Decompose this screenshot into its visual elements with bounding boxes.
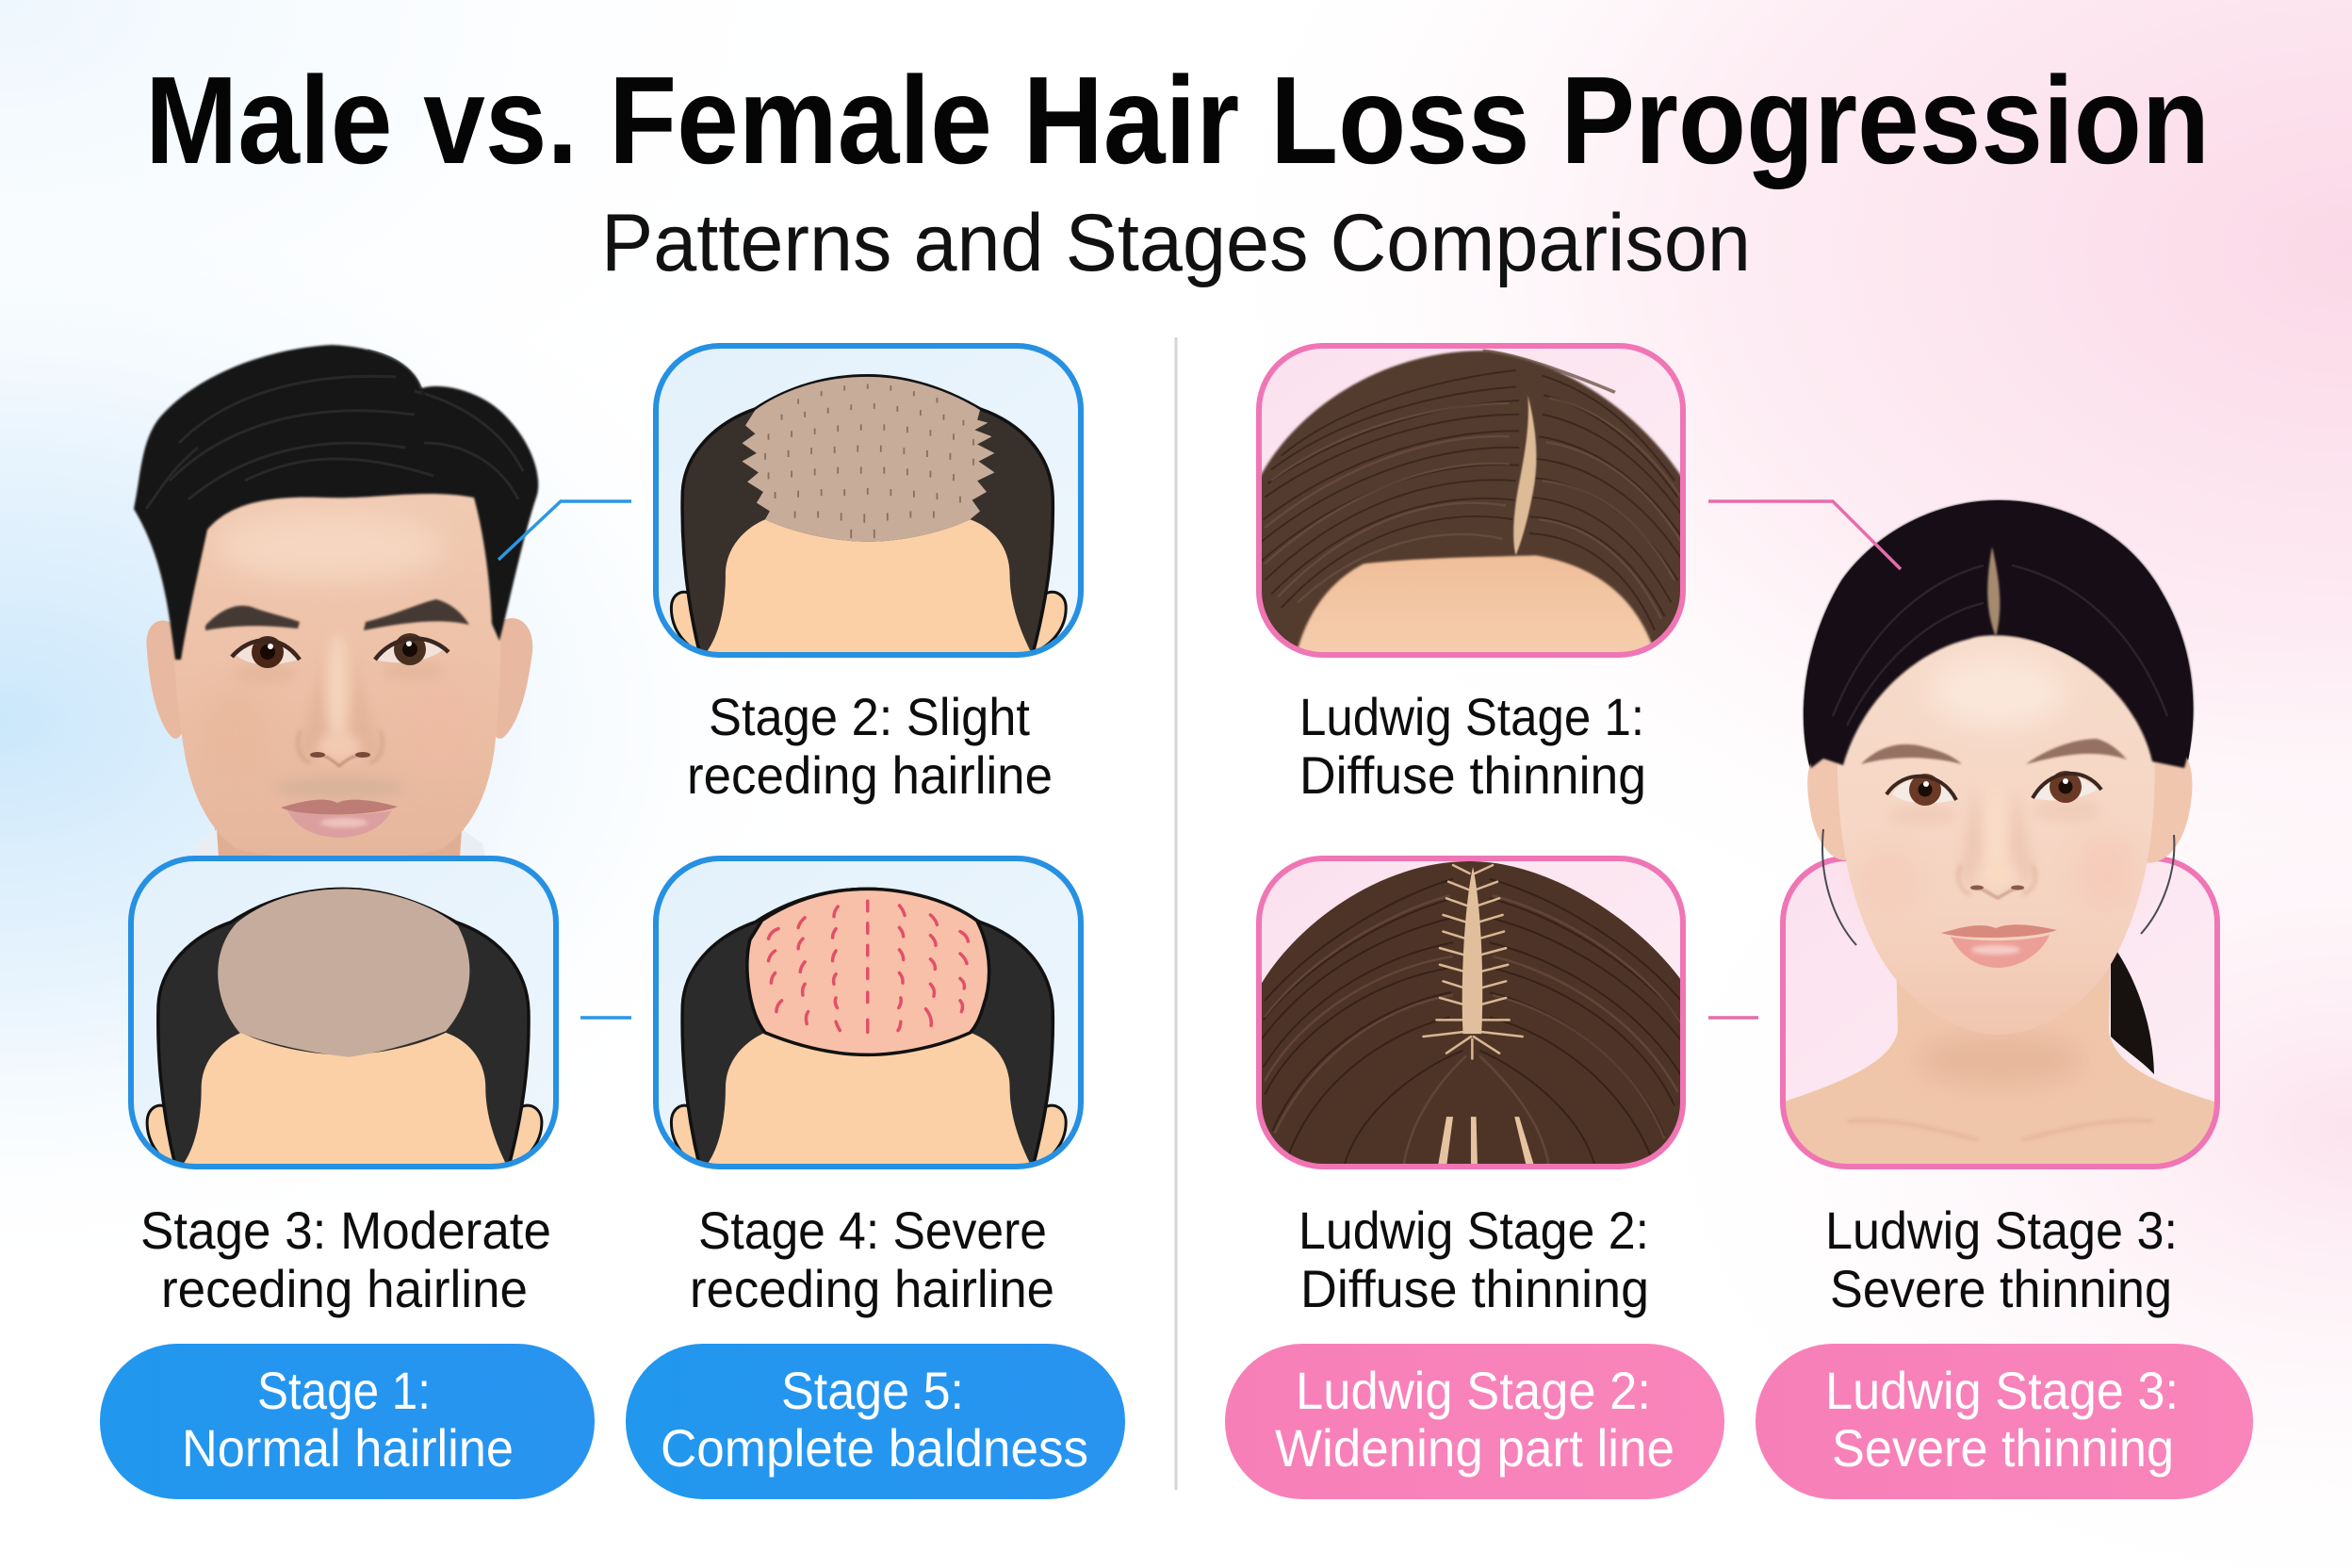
ears [146,620,182,739]
connector: stage 3 to stage 4 [580,1016,631,1020]
pill: Ludwig stage 2: Ludwig Stage 2: [1296,1361,1651,1420]
portrait: man with normal hairline [134,345,538,858]
label: Ludwig stage 1: Ludwig Stage 1: [1299,687,1644,746]
label: stage 4 [690,1200,1054,1318]
panel: Ludwig stage 2 [1258,858,1688,1172]
pill: stage 5 [626,1344,1125,1499]
widening part [1423,865,1523,1059]
pill: Ludwig stage 3: Severe thinning [1832,1418,2174,1478]
panel: stage 2 slight receding hairline [656,346,1081,655]
lips [281,800,398,814]
label: Ludwig stage 3 [1825,1200,2178,1318]
thinning crown [742,377,994,542]
connector: Ludwig stage 1 to portrait [1708,501,1901,569]
connector: Ludwig stage 2 to stage 3 [1708,1016,1758,1020]
panel: Ludwig stage 1 [1258,346,1688,663]
pill: stage 1: Normal hairline [182,1418,514,1478]
label: stage 4: Stage 4: Severe [698,1200,1047,1260]
back hair [1804,500,2193,820]
face [172,481,500,858]
eyes [1886,771,2101,806]
label: stage 3 [140,1200,551,1318]
face [1838,633,2155,1035]
label: Ludwig stage 3: Ludwig Stage 3: [1825,1200,2178,1260]
label: Ludwig stage 2: Diffuse thinning [1300,1259,1649,1318]
strands [1262,370,1681,630]
label: Ludwig stage 1: Diffuse thinning [1299,745,1646,805]
forehead [706,519,1032,653]
label: stage 3: Stage 3: Moderate [140,1200,551,1260]
connector: stage 1 to stage 2 [498,501,631,560]
pill: Ludwig stage 2 [1225,1344,1724,1499]
label: stage 2: Stage 2: Slight [709,687,1030,746]
hair [134,345,538,660]
shading [217,513,443,580]
thin strands [1822,829,2174,945]
ears [1807,754,1854,860]
pill: stage 5: Complete baldness [661,1418,1088,1478]
nose [1958,865,2035,898]
label: Ludwig stage 2: Ludwig Stage 2: [1298,1200,1649,1260]
panel: Ludwig stage 3 portrait frame [1776,858,2224,1173]
label: Ludwig stage 1 [1299,687,1646,805]
label: Ludwig stage 2 [1298,1200,1649,1318]
label: stage 4: receding hairline [690,1259,1054,1318]
exposed inflamed scalp [747,889,989,1054]
ears [671,592,1066,652]
pill: stage 5: Stage 5: [781,1361,964,1420]
eyebrows [205,606,300,630]
part line [1513,395,1536,555]
lips [1941,924,2057,938]
pill: Ludwig stage 2: Widening part line [1275,1418,1674,1478]
pill: stage 1 [100,1344,595,1499]
label: stage 2: receding hairline [687,745,1053,805]
neck [215,827,464,856]
part line [1987,547,2000,637]
panel: stage 3 moderate receding hairline [131,858,556,1167]
panel: stage 4 severe receding hairline [656,858,1081,1167]
hair top with centre part [1804,500,2193,768]
nose [298,730,383,766]
label: stage 2 [687,687,1053,805]
scalp [1297,554,1653,652]
bald patch [218,889,469,1057]
label: stage 3: receding hairline [161,1259,528,1318]
label: Ludwig stage 3: Severe thinning [1830,1259,2172,1318]
eyebrows [1861,744,1962,764]
ponytail [2111,942,2154,1074]
subtitle: Patterns and Stages Comparison [601,198,1751,288]
shading [1859,847,1919,915]
eyes [232,633,449,668]
hair [1258,351,1688,663]
hair [682,376,1053,653]
pill: stage 1: Stage 1: [257,1361,431,1420]
pill: Ludwig stage 3 [1756,1344,2253,1499]
pill: Ludwig stage 3: Ludwig Stage 3: [1825,1361,2179,1420]
portrait: woman [1804,500,2193,1074]
